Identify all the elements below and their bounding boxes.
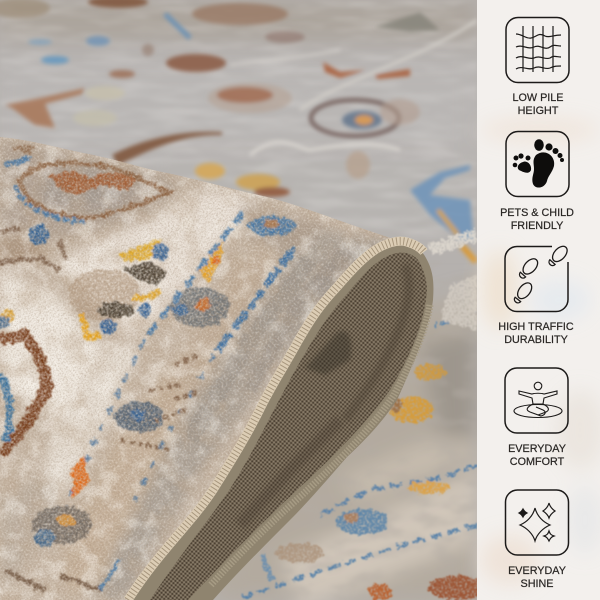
icon: pile fibres bbox=[506, 18, 569, 82]
rolled rug underside bbox=[128, 241, 433, 600]
feature: everyday shine bbox=[506, 490, 568, 590]
feature: pets and child friendly: FRIENDLY bbox=[511, 220, 563, 232]
background floral motifs bbox=[0, 0, 477, 262]
pile grain texture bbox=[0, 137, 388, 600]
icon: sparkles bbox=[506, 490, 568, 555]
label: EVERYDAY bbox=[508, 443, 566, 455]
icon: footsteps bbox=[505, 244, 570, 312]
rug foreground pile bbox=[0, 137, 390, 600]
feature: high traffic durability: DURABILITY bbox=[504, 334, 568, 346]
foreground medallion and motifs bbox=[0, 148, 350, 590]
label: HIGH TRAFFIC bbox=[498, 321, 574, 333]
feature: everyday comfort: COMFORT bbox=[510, 456, 565, 468]
feature: low pile height bbox=[506, 18, 569, 117]
cream rug binding edge bbox=[128, 241, 424, 600]
feature: pets and child friendly bbox=[500, 132, 574, 232]
feature: high traffic durability bbox=[498, 244, 574, 346]
icon: meditating figure bbox=[505, 368, 568, 433]
feature panel bbox=[477, 0, 600, 600]
feature: everyday shine: SHINE bbox=[520, 578, 554, 590]
lower right floor motifs bbox=[240, 235, 488, 600]
label: PETS & CHILD bbox=[500, 207, 574, 219]
feature: everyday comfort bbox=[505, 368, 568, 468]
label: EVERYDAY bbox=[508, 565, 566, 577]
icon: paw and foot prints bbox=[506, 132, 569, 196]
feature: low pile height: HEIGHT bbox=[518, 105, 559, 117]
label: LOW PILE bbox=[512, 92, 564, 104]
